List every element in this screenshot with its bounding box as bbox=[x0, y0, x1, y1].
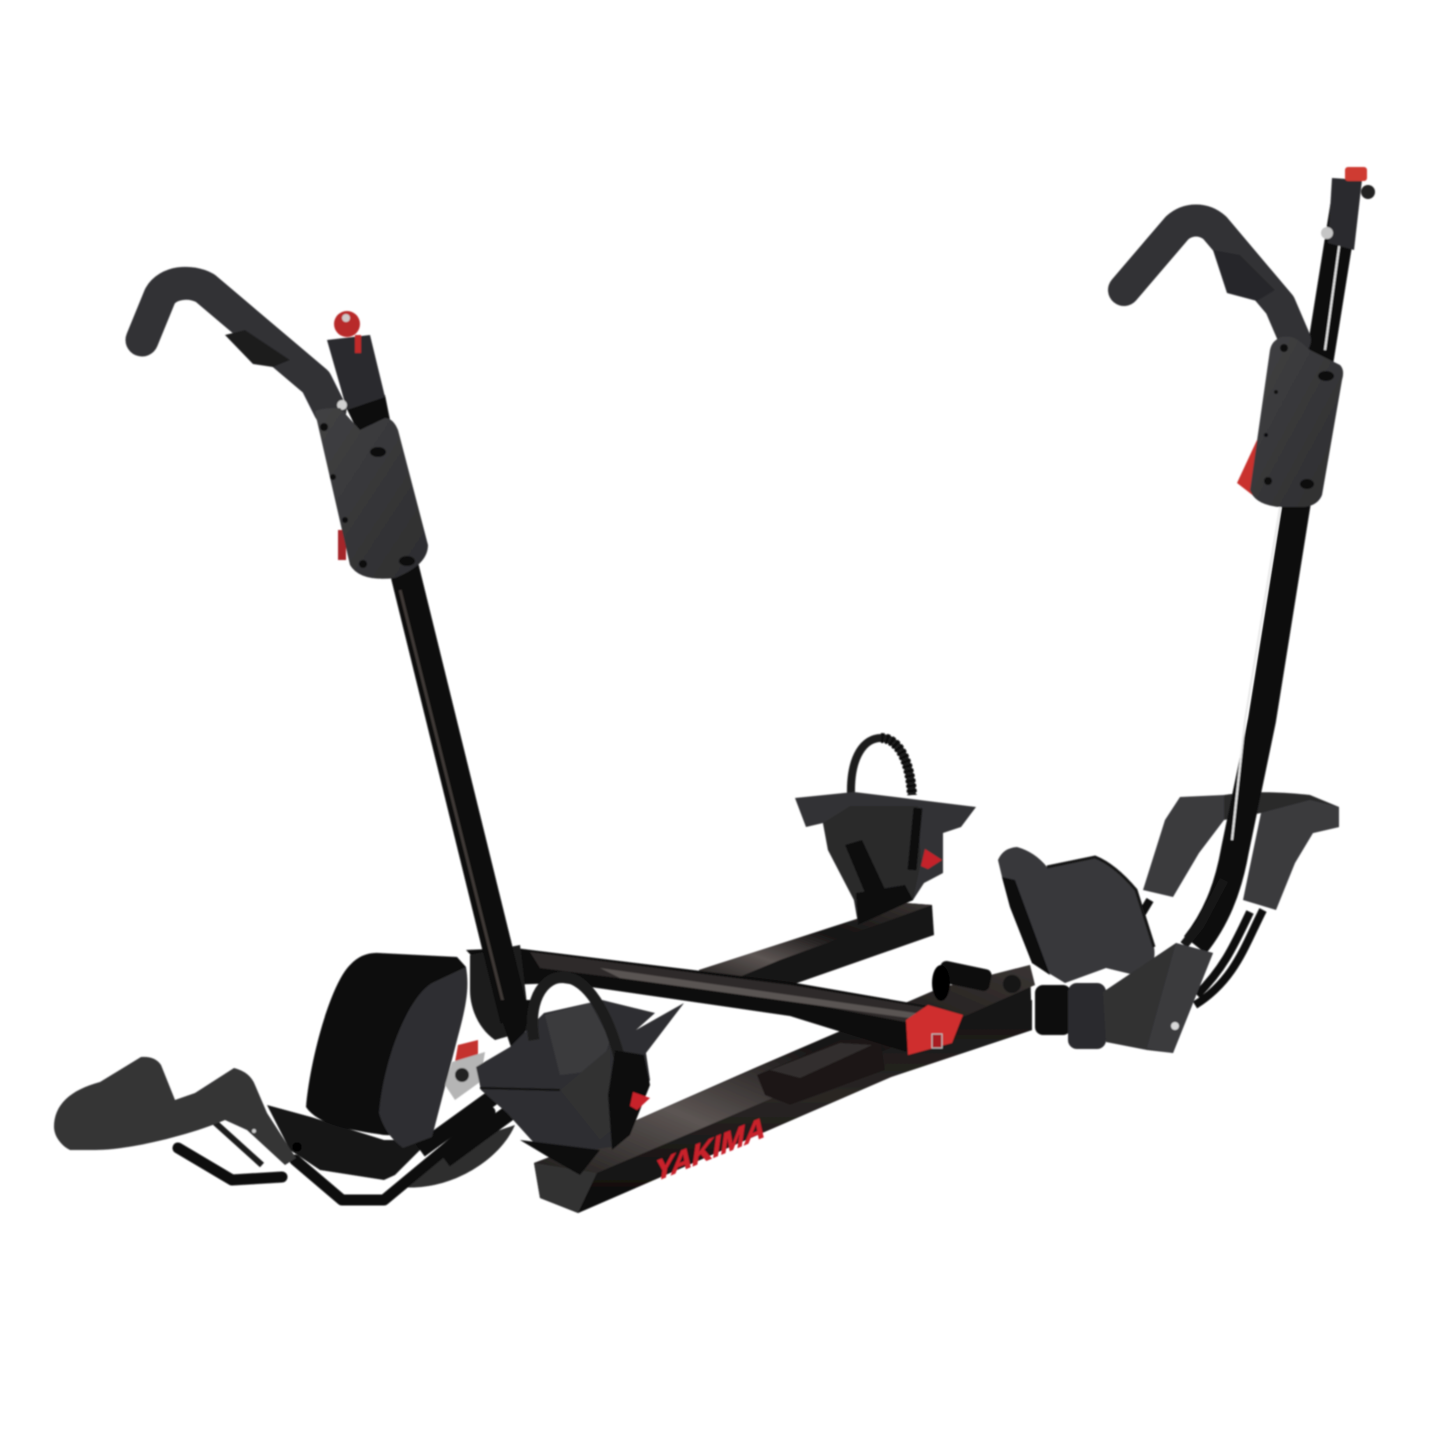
red release bbox=[630, 1092, 650, 1110]
base block bbox=[267, 1105, 430, 1180]
pod bbox=[1250, 337, 1343, 507]
pod holes bbox=[1264, 344, 1334, 489]
fork tube bbox=[178, 1112, 490, 1200]
pod holes bbox=[320, 423, 415, 568]
red knob bbox=[334, 311, 360, 337]
hitch plate bbox=[757, 1038, 885, 1105]
cap latch bbox=[932, 1034, 942, 1048]
handlebar grip bbox=[54, 1057, 296, 1165]
rear crossbar leg bbox=[699, 903, 934, 1000]
tube highlight bbox=[1232, 240, 1340, 840]
side pin bbox=[337, 400, 347, 410]
red knob bbox=[1345, 167, 1367, 181]
silver disc bbox=[400, 1125, 515, 1188]
pod bbox=[315, 408, 428, 579]
buckle bbox=[608, 1050, 650, 1150]
second lower tube bbox=[1184, 880, 1224, 945]
knob latch bbox=[1361, 185, 1375, 199]
hook wedge bbox=[1213, 250, 1275, 301]
second fork tube bbox=[210, 1118, 262, 1165]
pivot hub bbox=[1035, 943, 1213, 1053]
side pin bbox=[1321, 227, 1333, 239]
rear wheel seat with strap bbox=[795, 738, 976, 925]
collar bbox=[345, 395, 390, 432]
fork back band bbox=[1224, 792, 1339, 833]
red cap bbox=[906, 1005, 963, 1055]
pin hole bbox=[292, 1142, 302, 1152]
rail logo: YAKIMA bbox=[653, 1109, 768, 1189]
plate behind arm bbox=[470, 945, 530, 1040]
knob top bbox=[342, 314, 350, 322]
seat foot bbox=[520, 1140, 600, 1175]
inner pad bbox=[379, 967, 467, 1148]
tube highlight bbox=[400, 590, 505, 1010]
ratchet strap bbox=[532, 977, 620, 1060]
frame arm tubes bbox=[420, 1085, 520, 1160]
red lever hint bbox=[338, 530, 346, 560]
main long rail bbox=[534, 960, 1035, 1213]
cross tube with red end cap bbox=[466, 948, 963, 1055]
fork right fin bbox=[1243, 800, 1339, 910]
red lever bbox=[1237, 440, 1266, 497]
hook bbox=[1124, 220, 1295, 340]
hitch pin knob bbox=[937, 960, 993, 992]
fork wire loops bbox=[1135, 900, 1263, 1005]
icon: red strap release bbox=[921, 849, 942, 869]
red strap bbox=[355, 335, 361, 353]
outer pad bbox=[306, 953, 466, 1137]
left cradle assembly bbox=[54, 945, 530, 1200]
right upright arm bbox=[1124, 167, 1375, 1005]
knob end bbox=[932, 965, 950, 1001]
red catch bbox=[455, 1040, 478, 1062]
tube lower foot bbox=[495, 1000, 532, 1050]
round bolt bbox=[1003, 975, 1021, 993]
fork left fin bbox=[1143, 795, 1224, 897]
hook wedge bbox=[225, 330, 290, 367]
head clamp bbox=[1328, 178, 1362, 250]
head clamp bbox=[327, 335, 385, 410]
main tube bbox=[402, 560, 515, 1020]
main tube bbox=[1195, 195, 1346, 945]
plate surface bbox=[770, 1043, 872, 1078]
right wheel cradle pad bbox=[998, 847, 1155, 983]
hook bbox=[142, 283, 330, 410]
left upright arm bbox=[142, 283, 532, 1050]
front wheel seat with strap bbox=[476, 977, 684, 1175]
silver clamp bbox=[445, 1052, 485, 1100]
